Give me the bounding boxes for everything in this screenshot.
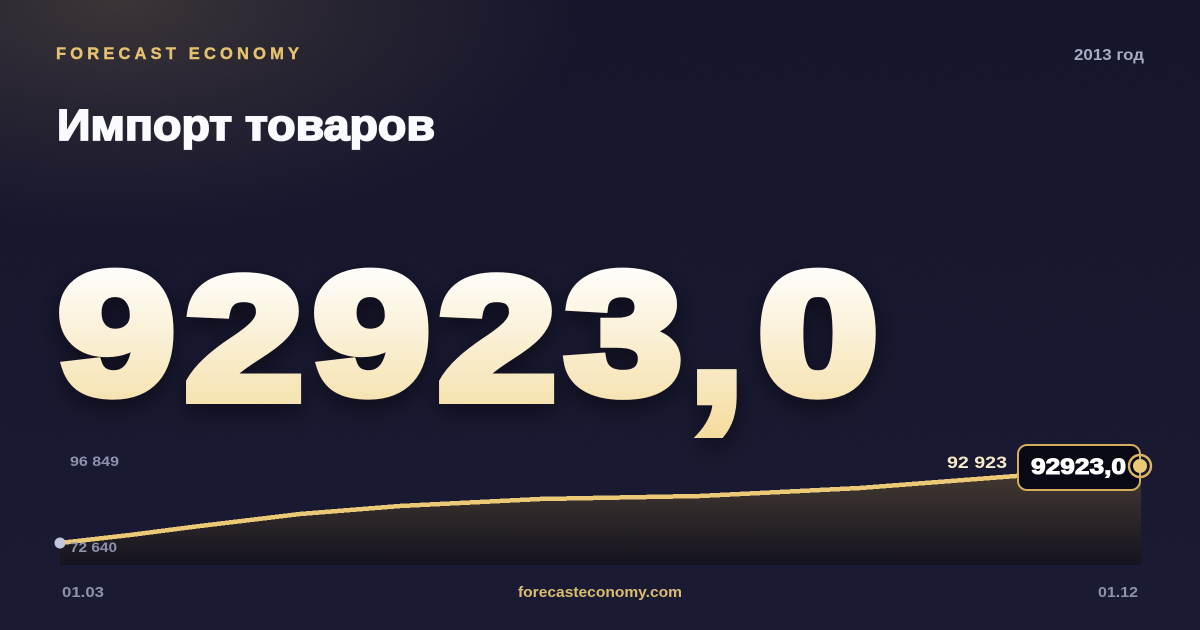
main value: 3 (565, 238, 681, 429)
chart area fill (60, 466, 1141, 565)
end date: 01.12 (1098, 584, 1138, 601)
main value: 2 (185, 242, 303, 435)
axis min label: 72 640 (70, 539, 117, 555)
last value label: 92 923 (947, 453, 1007, 472)
main value: 9 (59, 238, 175, 429)
chart line (60, 466, 1141, 543)
year label: 2013 год (1074, 47, 1144, 64)
main value (59, 212, 878, 448)
start point (54, 538, 66, 548)
main value: 2 (438, 242, 556, 435)
value tooltip (1018, 445, 1140, 490)
start date: 01.03 (62, 584, 104, 601)
axis max label: 96 849 (70, 453, 119, 469)
end point marker (1129, 455, 1151, 477)
brand heading: FORECAST ECONOMY (56, 45, 299, 63)
main value: 9 (314, 238, 430, 429)
title: Импорт товаров (57, 101, 435, 150)
main value: , (683, 212, 750, 448)
site url: forecasteconomy.com (518, 584, 682, 601)
main value: 0 (759, 239, 878, 430)
line chart (60, 466, 1141, 565)
value tooltip: 92923,0 (1031, 454, 1126, 479)
